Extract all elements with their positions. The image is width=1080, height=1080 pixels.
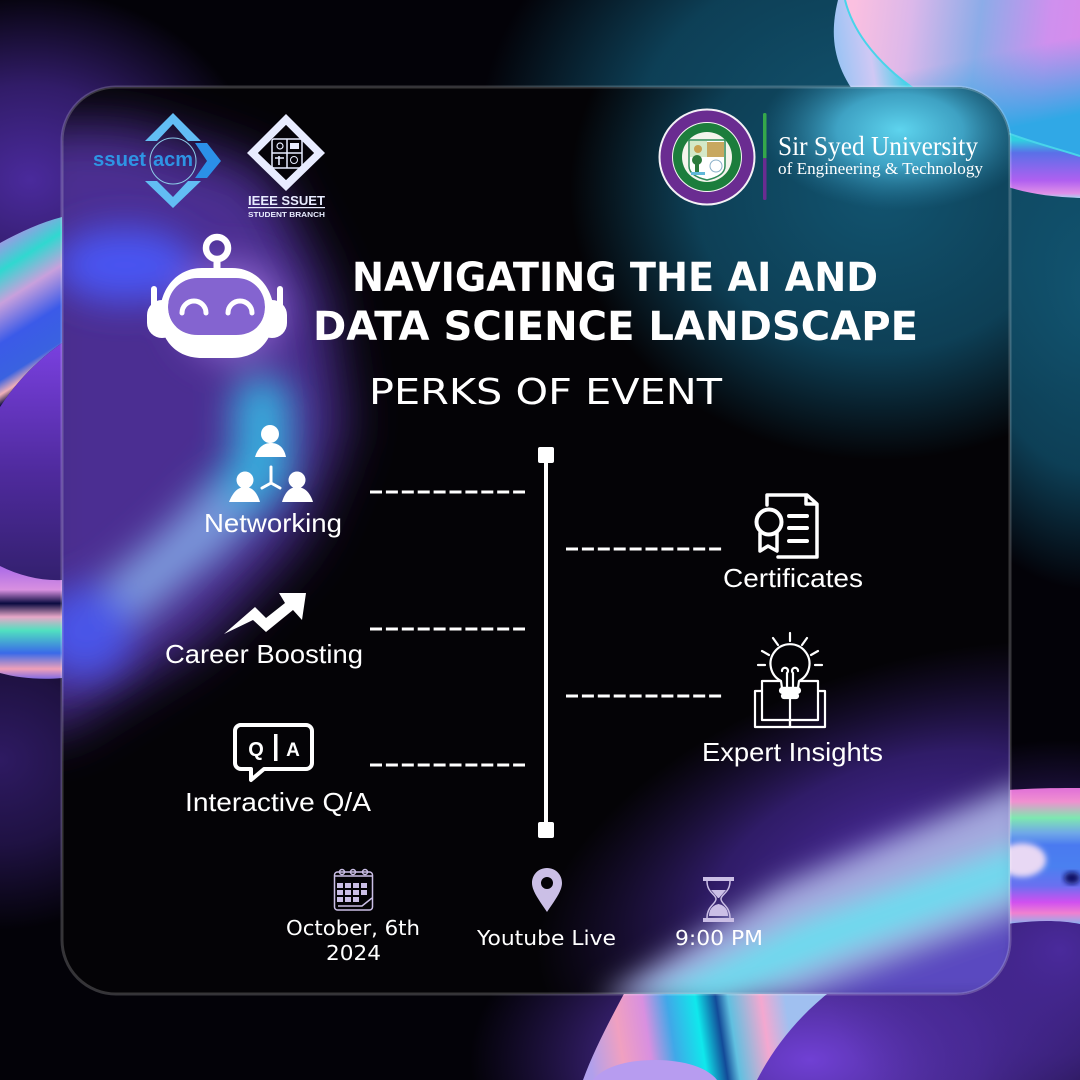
title bbox=[313, 255, 918, 350]
logo: ssuet acm bbox=[93, 113, 221, 208]
perk: networking: Networking bbox=[204, 508, 342, 538]
ring: bottom bbox=[583, 990, 832, 1080]
university name: of Engineering & Technology bbox=[778, 159, 984, 178]
perk: interactive q/a bbox=[185, 725, 372, 817]
divider: university logo bbox=[763, 113, 766, 200]
university name: Sir Syed University bbox=[778, 131, 978, 161]
info: date: October, 6th bbox=[286, 916, 420, 940]
perk: certificates: Certificates bbox=[723, 563, 863, 593]
logo: ssuet acm: acm bbox=[153, 149, 193, 171]
perk: expert insights bbox=[702, 633, 883, 767]
info: time bbox=[675, 877, 763, 950]
title: NAVIGATING THE AI AND bbox=[352, 255, 878, 301]
perk: networking bbox=[204, 425, 342, 538]
ring: left bbox=[0, 217, 62, 679]
logo: university seal bbox=[658, 108, 756, 206]
ring: right bbox=[998, 788, 1080, 924]
logo: ieee ssuet: IEEE SSUET bbox=[248, 194, 325, 208]
info: location bbox=[476, 868, 616, 950]
perk: career boosting: Career Boosting bbox=[165, 639, 363, 669]
perk: career boosting bbox=[165, 593, 363, 669]
perk: interactive q/a: Q bbox=[248, 739, 264, 761]
perk: interactive q/a: A bbox=[286, 740, 300, 761]
ring: top right bbox=[834, 0, 1080, 198]
info: time: 9:00 PM bbox=[675, 926, 763, 950]
logo: ssuet acm: ssuet bbox=[93, 149, 146, 171]
info: date: 2024 bbox=[326, 941, 381, 965]
title: DATA SCIENCE LANDSCAPE bbox=[313, 304, 918, 350]
logo: ieee ssuet: STUDENT BRANCH bbox=[248, 210, 325, 219]
connector dashes bbox=[370, 492, 722, 765]
info: date bbox=[286, 870, 420, 965]
perk: expert insights: Expert Insights bbox=[702, 737, 883, 767]
perk: certificates bbox=[723, 495, 863, 593]
perk: interactive q/a: Interactive Q/A bbox=[185, 787, 372, 817]
subtitle: PERKS OF EVENT bbox=[369, 372, 723, 413]
info: location: Youtube Live bbox=[476, 926, 616, 950]
timeline bbox=[538, 447, 554, 838]
logo: ieee ssuet bbox=[247, 114, 325, 219]
panel: glass card bbox=[20, 87, 1030, 1010]
icon: robot bbox=[147, 237, 287, 358]
university name bbox=[778, 131, 984, 178]
